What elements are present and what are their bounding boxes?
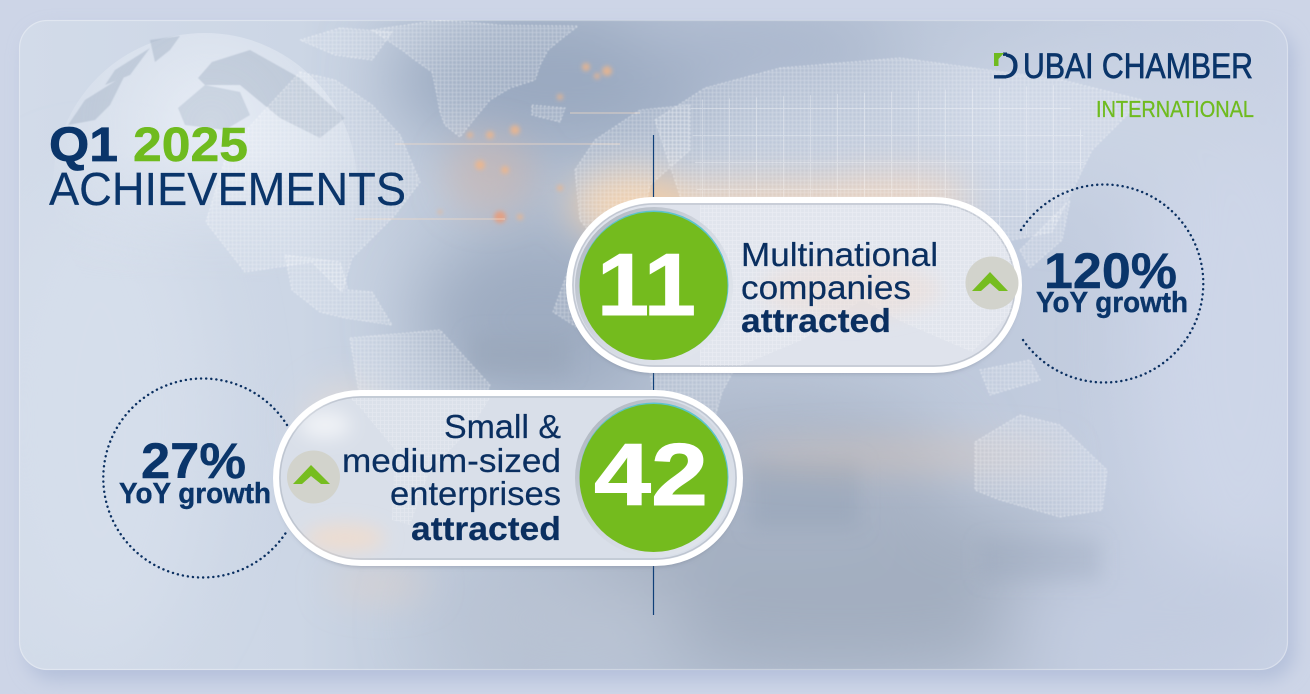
warm light glow [310,134,999,598]
South America [350,330,490,525]
Europe [575,105,690,245]
number circle 11: 11 [597,235,696,334]
globe [69,33,354,208]
icon: up chevron [966,256,1018,310]
title: Q1 [49,119,118,172]
description text: attracted [411,510,561,547]
dark city and port photo haze [373,20,1094,670]
title: 2025 [133,119,248,172]
map seen through glass [700,205,1016,366]
number circle 42: 42 [594,425,708,524]
title [49,119,406,215]
Greenland and Arctic [372,20,578,137]
number circle 42 [575,399,733,557]
logo: Dubai Chamber International [994,52,1254,118]
description text [741,236,938,339]
wide map grid over Asia [690,86,1084,234]
Africa [552,272,733,414]
logo: Dubai Chamber International: INTERNATIONAL [1096,96,1254,122]
stat: 120% YoY growth: 120% [1044,243,1177,299]
logo: Dubai Chamber International: UBAI CHAMBER [1023,47,1253,86]
description text: Small & [444,408,561,445]
description text: enterprises [390,475,561,512]
container stacks [758,468,1094,574]
icon: up chevron [287,450,340,504]
stat: 120% YoY growth [1036,243,1188,319]
dotted circle: 27% growth [103,378,287,578]
stat: 27% YoY growth [119,433,271,510]
Japan and islands [980,200,1070,395]
dotted circle: 120% growth [1021,184,1203,382]
stat: 120% YoY growth: YoY growth [1036,287,1188,319]
description text [342,408,561,547]
description text: Multinational [741,236,938,273]
pill: multinational companies [569,200,1019,374]
number circle 11 [575,207,733,365]
title: ACHIEVEMENTS [49,163,406,215]
Australia [975,415,1107,517]
North America [206,72,420,292]
stat: 27% YoY growth: 27% [141,433,246,489]
logo: Dubai Chamber International: D [992,47,1019,86]
Central America [285,255,392,325]
stat: 27% YoY growth: YoY growth [119,478,271,510]
light trails [355,113,640,219]
description text: medium-sized [342,442,561,479]
dotted world map [206,20,1142,525]
city lights [438,63,612,223]
description text: companies [741,269,911,306]
blurred glow seen through glass [299,398,490,552]
Asia [655,58,1142,352]
description text: attracted [741,302,891,339]
vertical timeline line [652,135,654,615]
pill: small and medium-sized enterprises [276,393,740,567]
